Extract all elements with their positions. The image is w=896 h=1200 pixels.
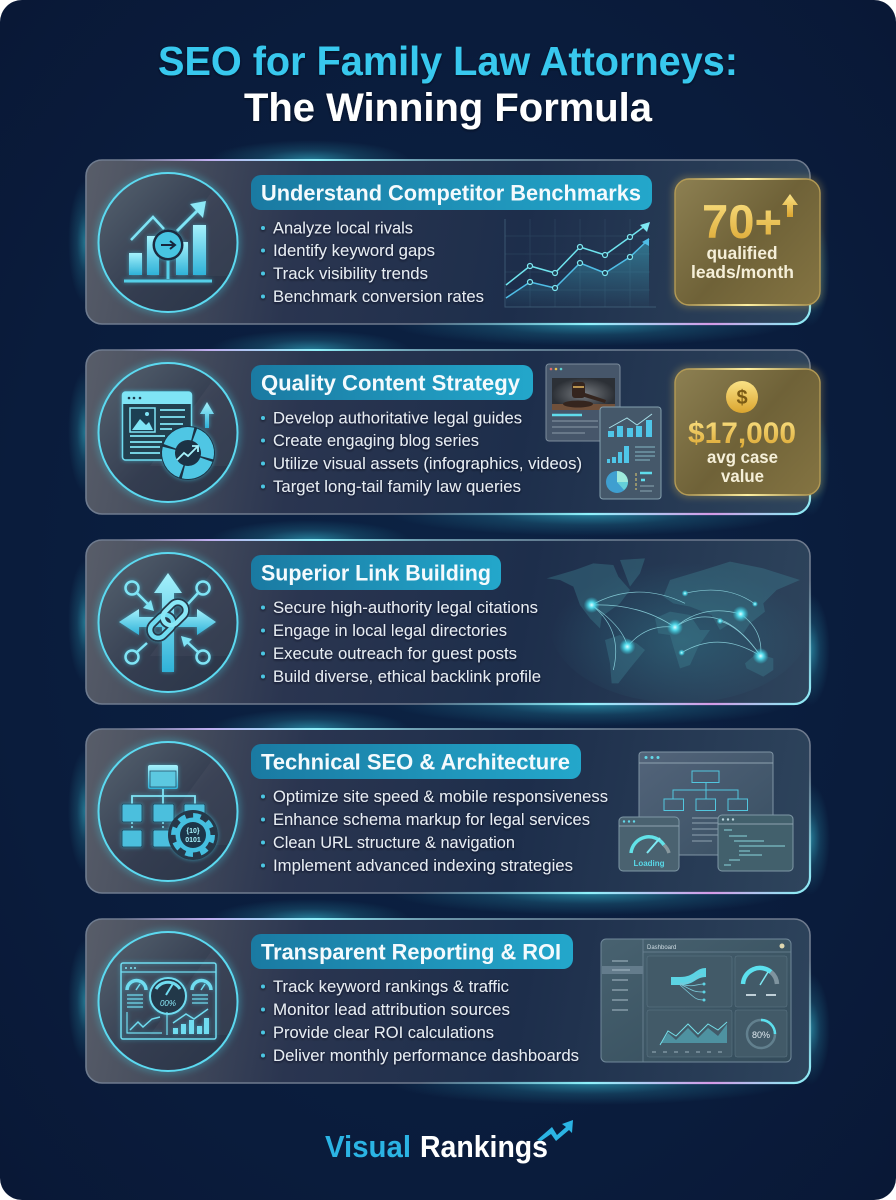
logo: Visual Rankings: Visual bbox=[325, 1129, 411, 1164]
card 2: content strategy bbox=[68, 330, 830, 536]
bullet list: Optimize site speed & mobile responsiveness bbox=[273, 787, 608, 806]
bullet list bbox=[261, 218, 484, 306]
bullet list: Engage in local legal directories bbox=[273, 621, 507, 640]
icon: analytics dashboard bbox=[121, 963, 216, 1039]
bullet list: Provide clear ROI calculations bbox=[273, 1023, 494, 1042]
bullet list: Execute outreach for guest posts bbox=[273, 644, 517, 663]
card 3: link building bbox=[68, 520, 830, 726]
bullet list: Utilize visual assets (infographics, videos) bbox=[273, 454, 582, 473]
illustration: performance dashboard: Dashboard bbox=[647, 945, 676, 951]
heading pill bbox=[251, 934, 573, 969]
heading pill bbox=[251, 555, 501, 590]
line chart bbox=[505, 219, 656, 307]
icon: dollar coin bbox=[726, 381, 758, 413]
icon: dollar coin: $ bbox=[736, 387, 748, 409]
bullet list: Build diverse, ethical backlink profile bbox=[273, 667, 541, 686]
bullet list: Target long-tail family law queries bbox=[273, 477, 521, 496]
illustration: world map network bbox=[547, 547, 810, 703]
bullet list: Benchmark conversion rates bbox=[273, 287, 484, 306]
bullet list bbox=[261, 787, 608, 875]
bullet list: Enhance schema markup for legal services bbox=[273, 810, 590, 829]
illustration: sitemap, loading gauge and code windows bbox=[619, 752, 793, 871]
heading pill: Quality Content Strategy bbox=[261, 370, 521, 396]
icon: content window with cycle bbox=[122, 392, 215, 480]
icon: site architecture with gear bbox=[122, 765, 218, 860]
icon: site architecture with gear: {10} bbox=[186, 828, 200, 835]
illustration: performance dashboard: 80% bbox=[752, 1030, 770, 1040]
card 5: reporting and ROI bbox=[68, 899, 830, 1105]
bullet list: Track visibility trends bbox=[273, 264, 428, 283]
bullet list: Implement advanced indexing strategies bbox=[273, 856, 573, 875]
card 4: technical SEO bbox=[68, 709, 830, 915]
stat box: average case value: value bbox=[721, 466, 764, 486]
card 1: competitor benchmarks bbox=[68, 140, 830, 346]
icon: site architecture with gear: 0101 bbox=[185, 837, 201, 844]
stat box: qualified leads: leads/month bbox=[691, 262, 794, 282]
title bbox=[158, 38, 738, 130]
stat box: qualified leads: 70+ bbox=[702, 195, 782, 248]
stat box: qualified leads: qualified bbox=[706, 243, 778, 263]
stat box: qualified leads bbox=[672, 176, 823, 308]
bullet list: Identify keyword gaps bbox=[273, 241, 435, 260]
bullet list bbox=[261, 598, 541, 686]
logo: Visual Rankings: Rankings bbox=[420, 1129, 548, 1164]
bullet list: Monitor lead attribution sources bbox=[273, 1000, 510, 1019]
heading pill: Technical SEO & Architecture bbox=[261, 750, 570, 774]
heading pill bbox=[251, 365, 533, 400]
bullet list: Deliver monthly performance dashboards bbox=[273, 1046, 579, 1065]
illustration: performance dashboard bbox=[601, 939, 791, 1062]
bullet list: Clean URL structure & navigation bbox=[273, 833, 515, 852]
bullet list: Analyze local rivals bbox=[273, 218, 413, 238]
heading pill: Understand Competitor Benchmarks bbox=[261, 180, 641, 206]
bullet list: Develop authoritative legal guides bbox=[273, 408, 522, 428]
icon: analytics dashboard: 00% bbox=[160, 999, 176, 1008]
heading pill: Superior Link Building bbox=[261, 560, 491, 586]
bullet list: Create engaging blog series bbox=[273, 431, 479, 450]
bullet list bbox=[261, 977, 579, 1065]
title: SEO for Family Law Attorneys: bbox=[158, 38, 738, 84]
stat box: average case value bbox=[672, 366, 823, 498]
bullet list: Track keyword rankings & traffic bbox=[273, 977, 509, 996]
icon: chain link with arrows bbox=[119, 573, 216, 672]
stat box: average case value: avg case bbox=[707, 447, 778, 467]
heading pill: Transparent Reporting & ROI bbox=[261, 940, 561, 964]
title: The Winning Formula bbox=[244, 86, 653, 130]
logo: Visual Rankings bbox=[325, 1120, 573, 1164]
heading pill bbox=[251, 175, 652, 210]
illustration: video window and report bbox=[546, 364, 661, 499]
heading pill bbox=[251, 744, 581, 779]
stat box: average case value: $17,000 bbox=[688, 417, 796, 450]
bullet list bbox=[261, 408, 582, 496]
icon: bar chart with trend arrow bbox=[124, 201, 212, 281]
bullet list: Secure high-authority legal citations bbox=[273, 598, 538, 617]
illustration: sitemap, loading gauge and code windows: Loading bbox=[633, 859, 665, 868]
